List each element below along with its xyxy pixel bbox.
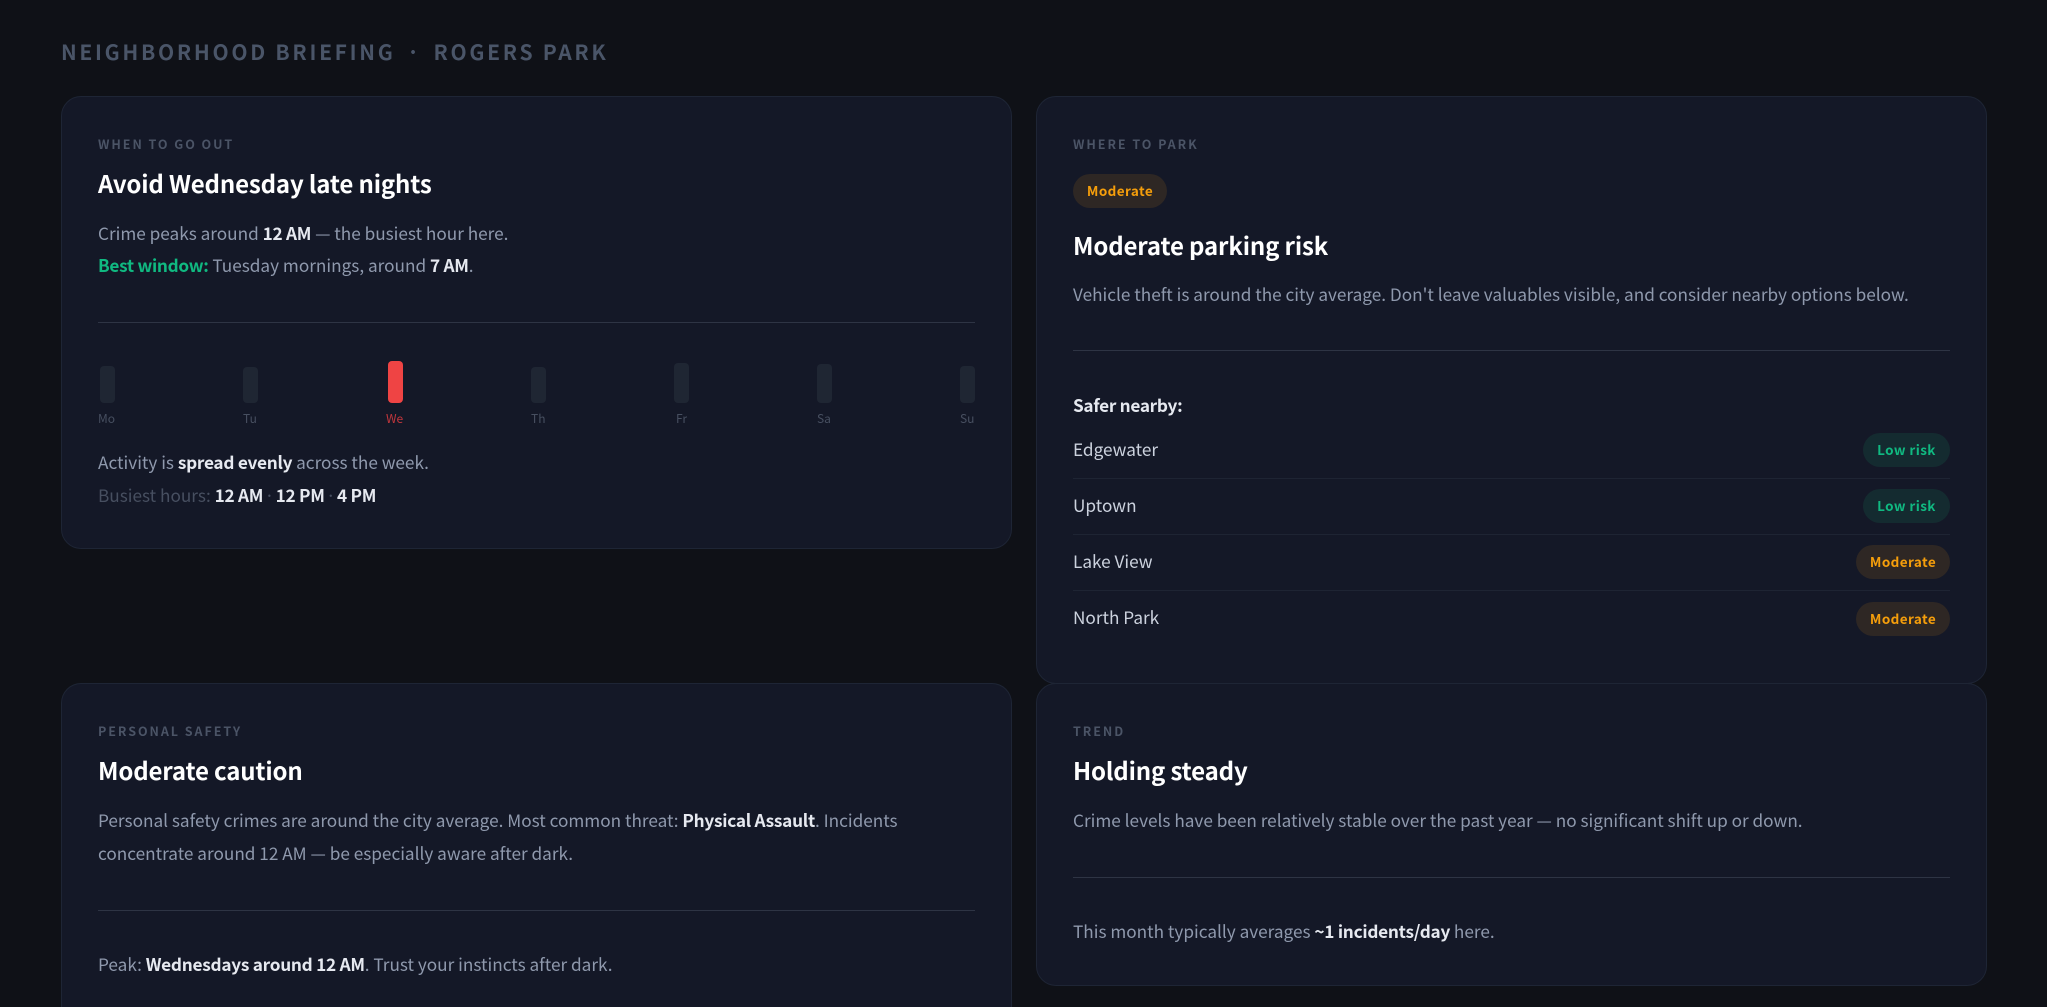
bar: Monday [100, 366, 115, 403]
title: NEIGHBORHOOD BRIEFING · ROGERS PARK [61, 37, 609, 67]
badge: moderate [1856, 602, 1950, 636]
bar: Friday [674, 363, 689, 403]
row: Edgewater: Edgewater [1073, 436, 1158, 461]
busiest hours text: Busiest hours: 12 AM · 12 PM · 4 PM [98, 482, 376, 507]
best window text: Best window: Tuesday mornings, around 7 AM. [98, 252, 474, 277]
safety description [98, 807, 898, 865]
weekly activity text: Activity is spread evenly across the week. [98, 449, 429, 474]
day label: Tu: Tu [243, 410, 257, 427]
section label: WHERE TO PARK [1073, 134, 1199, 153]
day label: Su: Su [960, 410, 974, 427]
safer nearby heading: Safer nearby: [1073, 392, 1182, 417]
section label: TREND [1073, 721, 1125, 740]
badge: moderate [1073, 174, 1167, 208]
parking description: Vehicle theft is around the city average. Don't leave valuables visible, and consider nearby options below. [1073, 281, 1909, 306]
bar: Tuesday [243, 367, 258, 403]
day label: Th: Th [531, 410, 545, 427]
badge: moderate [1856, 545, 1950, 579]
trend description: Crime levels have been relatively stable over the past year — no significant shift up or down. [1073, 807, 1803, 832]
panel: trend [1036, 683, 1987, 986]
bar: Thursday [531, 367, 546, 403]
day label: We: We [386, 410, 403, 427]
day label: Mo: Mo [98, 410, 115, 427]
badge: low risk: Low risk [1877, 439, 1936, 459]
bar: Wednesday peak [388, 361, 403, 403]
peak text: Crime peaks around 12 AM — the busiest hour here. [98, 220, 508, 245]
row: Uptown: Uptown [1073, 492, 1137, 517]
heading: Holding steady [1073, 752, 1248, 787]
peak text: Peak: Wednesdays around 12 AM. Trust your instincts after dark. [98, 951, 612, 976]
bar chart: activity by weekday [98, 361, 975, 427]
bar: Saturday [817, 364, 832, 403]
panel: where to park [1036, 96, 1987, 684]
heading: Moderate caution [98, 752, 303, 787]
bar: Sunday [960, 366, 975, 403]
heading: Moderate parking risk [1073, 227, 1328, 262]
row: Lake View: Lake View [1073, 548, 1153, 573]
safety description: concentrate around 12 AM — be especially aware after dark. [98, 840, 573, 865]
badge: moderate: Moderate [1870, 551, 1936, 571]
day label: Fr: Fr [676, 410, 687, 427]
badge: low risk [1863, 489, 1950, 523]
badge: low risk: Low risk [1877, 495, 1936, 515]
section label: PERSONAL SAFETY [98, 721, 242, 740]
heading: Avoid Wednesday late nights [98, 165, 432, 200]
safety description: Personal safety crimes are around the city average. Most common threat: Physical Assault. Incidents [98, 807, 898, 832]
row: North Park: North Park [1073, 604, 1159, 629]
panel: personal safety [61, 683, 1012, 1007]
badge: moderate: Moderate [1087, 180, 1153, 200]
section label: WHEN TO GO OUT [98, 134, 234, 153]
badge: low risk [1863, 433, 1950, 467]
day label: Sa: Sa [817, 410, 831, 427]
monthly average text: This month typically averages ~1 incidents/day here. [1073, 918, 1495, 943]
panel: when to go out [61, 96, 1012, 549]
badge: moderate: Moderate [1870, 608, 1936, 628]
